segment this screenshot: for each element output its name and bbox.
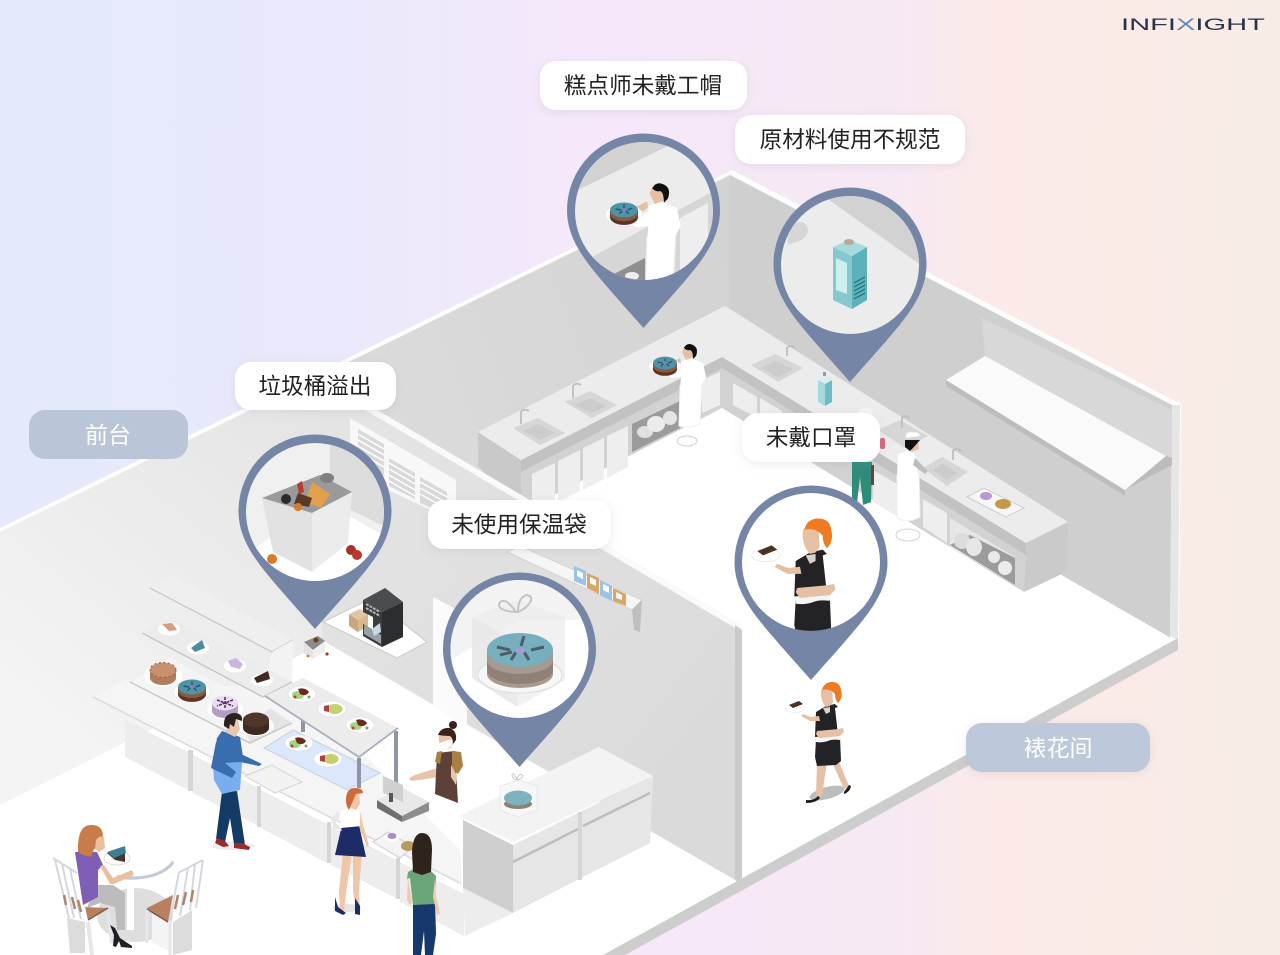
top pastry shelf xyxy=(150,575,293,697)
chef at counter xyxy=(668,344,706,446)
right face xyxy=(513,776,653,913)
tray with pastry xyxy=(967,488,1024,517)
cake box small xyxy=(500,774,537,817)
logo: INFI X IGHT xyxy=(1121,15,1265,34)
overflowing bin xyxy=(262,473,352,572)
kitchen floor xyxy=(470,380,1178,885)
base counter back xyxy=(93,680,462,885)
label: 糕点师未戴工帽: 糕点师未戴工帽 xyxy=(564,74,722,98)
L-shaped kitchen counter xyxy=(478,306,1068,592)
counter legs xyxy=(188,750,400,899)
area tag: 前台: 前台 xyxy=(85,422,131,448)
pin: trash bin xyxy=(238,434,392,629)
tomatoes xyxy=(346,545,362,560)
label: 原材料使用不规范: 原材料使用不规范 xyxy=(760,128,940,152)
transparent box xyxy=(472,595,565,707)
man in blue hoodie xyxy=(211,713,262,850)
label: 糕点师未戴工帽 xyxy=(540,61,747,110)
label: 原材料使用不规范 xyxy=(735,115,965,164)
label: 未戴口罩 xyxy=(742,413,880,462)
pin image xyxy=(781,196,919,334)
middle pastry shelf xyxy=(142,618,292,697)
label: 未使用保温袋 xyxy=(428,500,611,549)
green shirt girl xyxy=(407,833,440,955)
pin image xyxy=(742,493,880,631)
tall front counter xyxy=(459,747,653,936)
pin image xyxy=(246,443,384,581)
pin image xyxy=(450,580,588,718)
window slats xyxy=(358,429,447,515)
right chair xyxy=(147,860,203,955)
cashier with mask xyxy=(409,721,463,803)
counter front bands xyxy=(521,357,1026,555)
pin: pastry chef xyxy=(567,134,720,328)
wall shelf with boxes xyxy=(507,546,642,632)
counter edge xyxy=(93,697,460,883)
long serving counter xyxy=(93,697,464,936)
front room floor xyxy=(0,644,742,955)
kitchen rear-right wall xyxy=(730,175,1172,640)
waitress walking xyxy=(785,682,851,803)
kitchen rear-left wall xyxy=(322,175,730,498)
meals on table top xyxy=(288,686,374,733)
area tag: 前台 xyxy=(29,410,188,459)
display table lower blue shelf xyxy=(264,730,380,790)
top xyxy=(459,747,653,842)
counter right arm front xyxy=(722,357,1026,592)
sinks xyxy=(513,354,968,486)
chocolate cake xyxy=(238,712,274,736)
bottom left xyxy=(463,888,513,936)
faucets xyxy=(521,346,961,460)
display table top xyxy=(265,678,398,757)
counter top xyxy=(478,306,1068,543)
meals on lower shelf xyxy=(285,735,342,767)
label: 未戴口罩: 未戴口罩 xyxy=(766,426,856,450)
boxes xyxy=(574,566,626,606)
lower cake shelf xyxy=(130,658,292,743)
floor edge band xyxy=(603,638,1178,955)
partition wall face xyxy=(322,380,735,880)
round table xyxy=(97,860,174,942)
pin: cake in box xyxy=(443,572,596,767)
label: 未使用保温袋: 未使用保温袋 xyxy=(451,512,587,538)
girl in navy skirt xyxy=(331,788,369,915)
counter left end xyxy=(478,432,521,512)
pin: waitress xyxy=(734,486,890,691)
left chair xyxy=(53,858,112,955)
caramel cake xyxy=(144,662,182,687)
display table legs xyxy=(301,720,398,789)
building silhouette xyxy=(0,170,1181,955)
area tag: 裱花间 xyxy=(966,723,1150,772)
right wall edge xyxy=(1170,405,1180,640)
chef at sink xyxy=(896,432,928,541)
partition wall end xyxy=(735,625,742,885)
coffee boxes xyxy=(349,609,368,632)
white column xyxy=(433,597,467,726)
carton xyxy=(833,239,867,309)
open shelf with plates left xyxy=(632,401,680,452)
open shelf with plates right xyxy=(950,518,1015,585)
counter left arm front xyxy=(521,357,722,512)
small trash bin xyxy=(304,636,329,659)
counter right end xyxy=(1024,522,1068,592)
coffee machine xyxy=(363,588,403,647)
milk carton small xyxy=(818,372,832,406)
extractor hood xyxy=(946,318,1172,496)
cash register xyxy=(377,776,429,822)
pin image xyxy=(575,142,713,280)
counter tray with pastries xyxy=(373,832,415,858)
label: 垃圾桶溢出 xyxy=(235,362,396,410)
front room back wall xyxy=(0,375,322,805)
seated woman with cake xyxy=(75,825,134,948)
service window xyxy=(350,418,456,522)
pin: milk carton xyxy=(774,188,926,382)
sink basins xyxy=(523,361,958,480)
left face xyxy=(463,820,513,913)
coffee shelf xyxy=(323,598,427,658)
counter cabinets xyxy=(125,720,464,936)
coffee station xyxy=(323,588,427,658)
area tag: 裱花间: 裱花间 xyxy=(1024,735,1092,761)
cabinet doors xyxy=(532,372,947,543)
cake on counter xyxy=(649,357,681,376)
label: 垃圾桶溢出: 垃圾桶溢出 xyxy=(259,374,371,399)
purple cake xyxy=(207,696,243,719)
partition wall top xyxy=(350,394,742,632)
person in green trousers xyxy=(852,408,885,505)
serving tray xyxy=(245,765,302,793)
